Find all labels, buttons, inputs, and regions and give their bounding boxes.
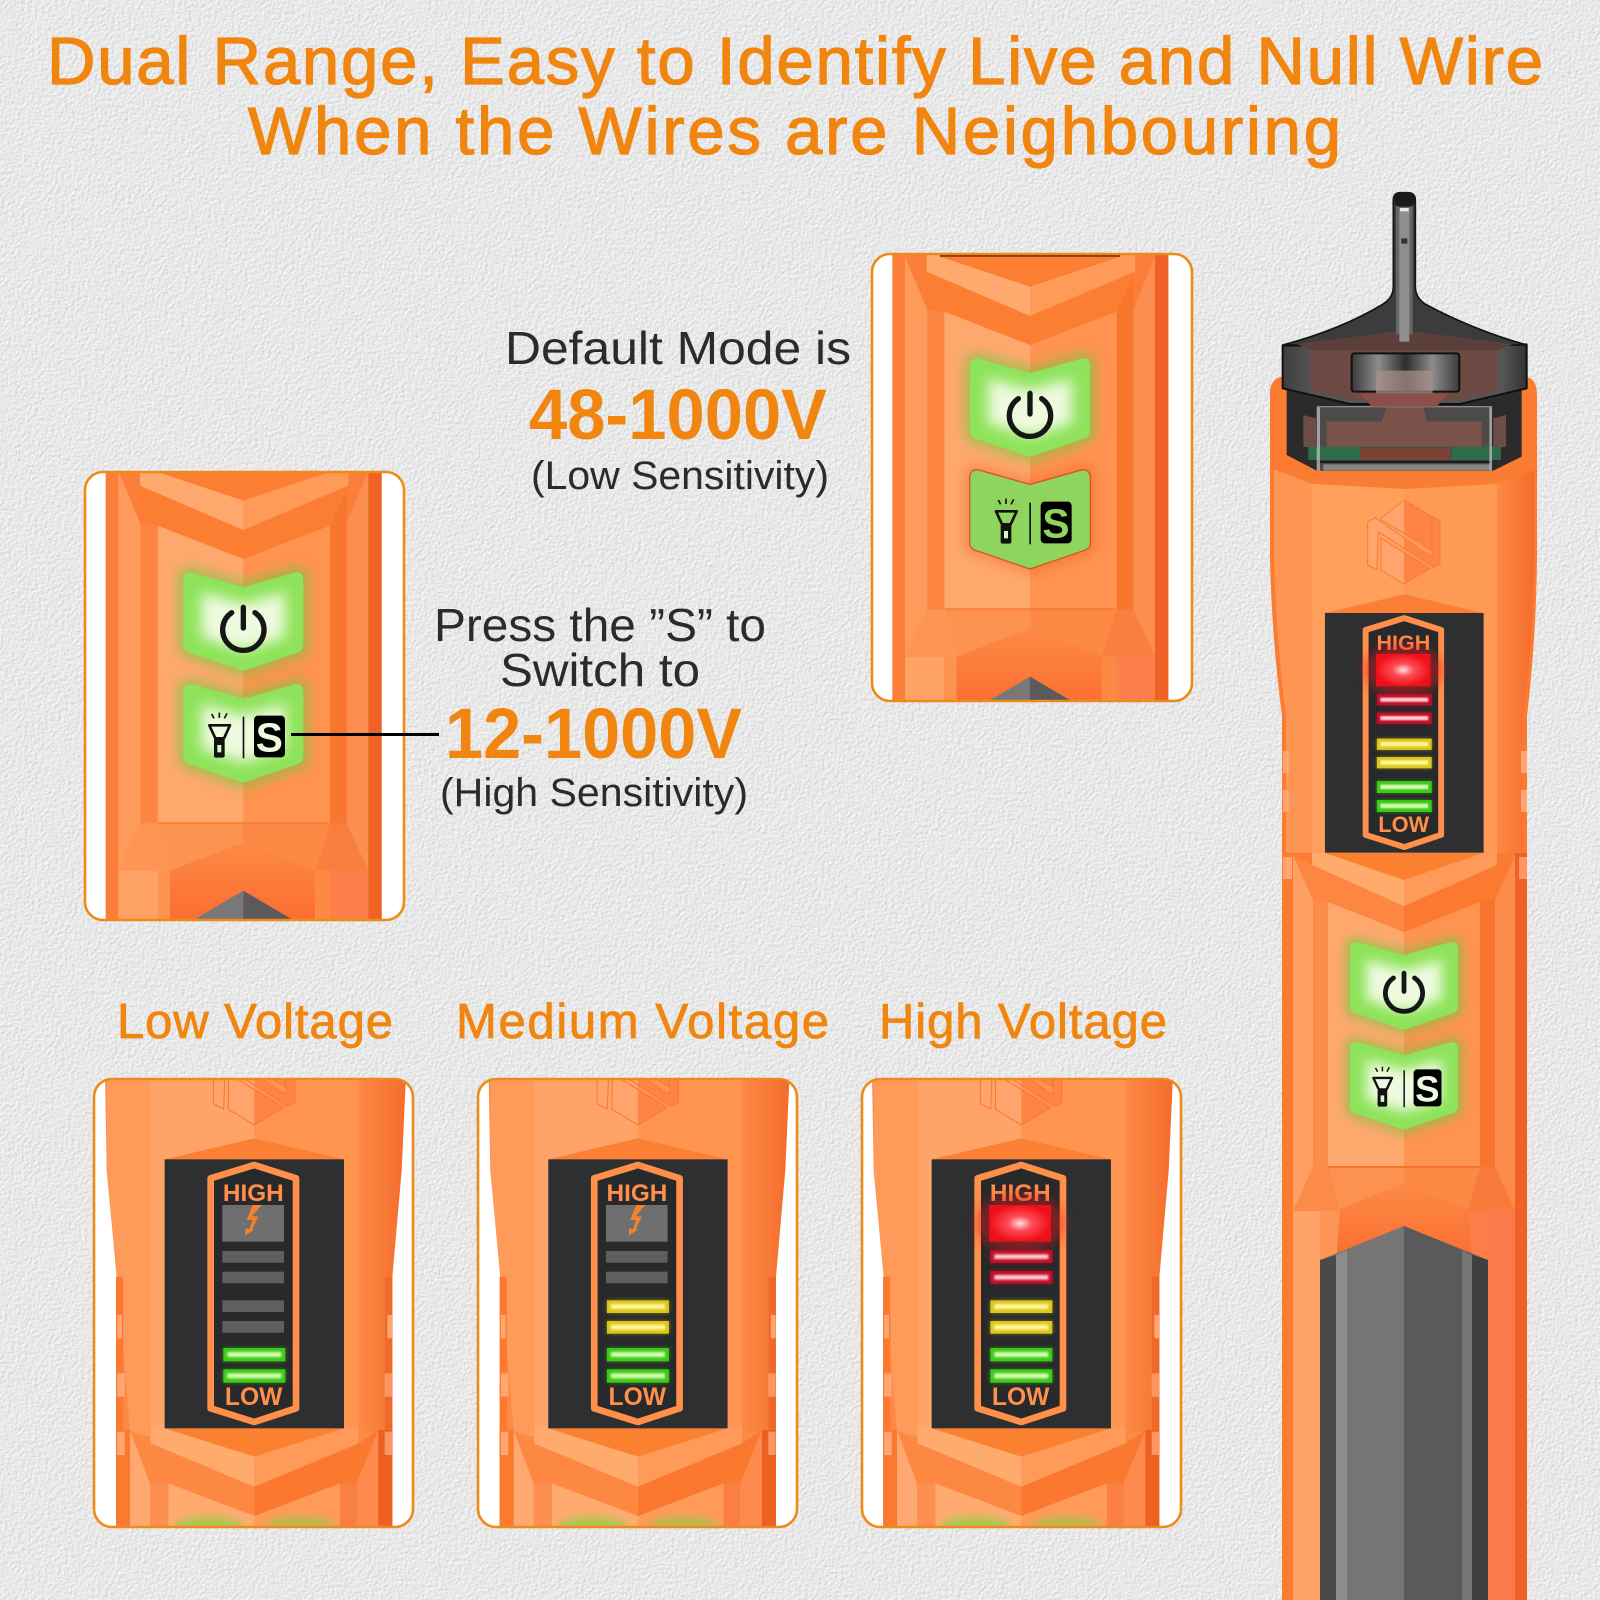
text block: press S to switch: 12-1000V xyxy=(445,695,742,774)
heading: low voltage: Low Voltage xyxy=(117,995,393,1049)
text block: default mode: (Low Sensitivity) xyxy=(531,454,829,498)
text block: press S to switch: Press the ”S” to xyxy=(434,599,766,651)
text block: default mode: Default Mode is xyxy=(505,322,851,374)
pen keypad buttons xyxy=(1356,948,1452,1124)
pen LED display: HIGH xyxy=(1376,630,1430,655)
pen LED display: LOW xyxy=(1378,812,1429,837)
tester pen product xyxy=(1270,193,1537,1600)
panel: high voltage display xyxy=(862,1031,1181,1536)
text block: default mode: 48-1000V xyxy=(529,376,827,455)
panel: default mode keypad: S xyxy=(1042,501,1070,547)
panel: high sensitivity keypad xyxy=(85,457,404,924)
text block: default mode xyxy=(505,322,851,498)
logo mark xyxy=(1368,500,1440,584)
panel: low voltage display: HIGH xyxy=(223,1180,284,1207)
text block: press S to switch xyxy=(434,599,766,815)
panel: low voltage display xyxy=(94,1031,413,1536)
panel: high sensitivity keypad: S xyxy=(256,715,283,761)
panel: medium voltage display: LOW xyxy=(609,1384,667,1411)
text block: press S to switch: Switch to xyxy=(500,644,700,696)
pen LED display xyxy=(1325,594,1484,853)
pen body xyxy=(1270,377,1537,1600)
panel: default mode keypad xyxy=(872,243,1192,710)
housing and probe tip xyxy=(1283,193,1527,471)
panel: high voltage display: LOW xyxy=(992,1384,1050,1411)
text block: press S to switch: (High Sensitivity) xyxy=(440,771,748,815)
title: Dual Range, Easy to Identify Live and Null Wire xyxy=(47,24,1543,99)
pen keypad buttons: S xyxy=(1415,1069,1440,1109)
panel: high voltage display: HIGH xyxy=(990,1180,1051,1207)
grey grip xyxy=(1320,1226,1488,1600)
panel: low voltage display: LOW xyxy=(225,1384,283,1411)
title xyxy=(47,24,1543,169)
panel: medium voltage display: HIGH xyxy=(607,1180,667,1207)
panel: medium voltage display xyxy=(478,1031,797,1536)
title: When the Wires are Neighbouring xyxy=(248,94,1341,169)
callout line to S button xyxy=(291,733,439,736)
heading: medium voltage: Medium Voltage xyxy=(456,995,829,1049)
heading: high voltage: High Voltage xyxy=(879,995,1167,1049)
